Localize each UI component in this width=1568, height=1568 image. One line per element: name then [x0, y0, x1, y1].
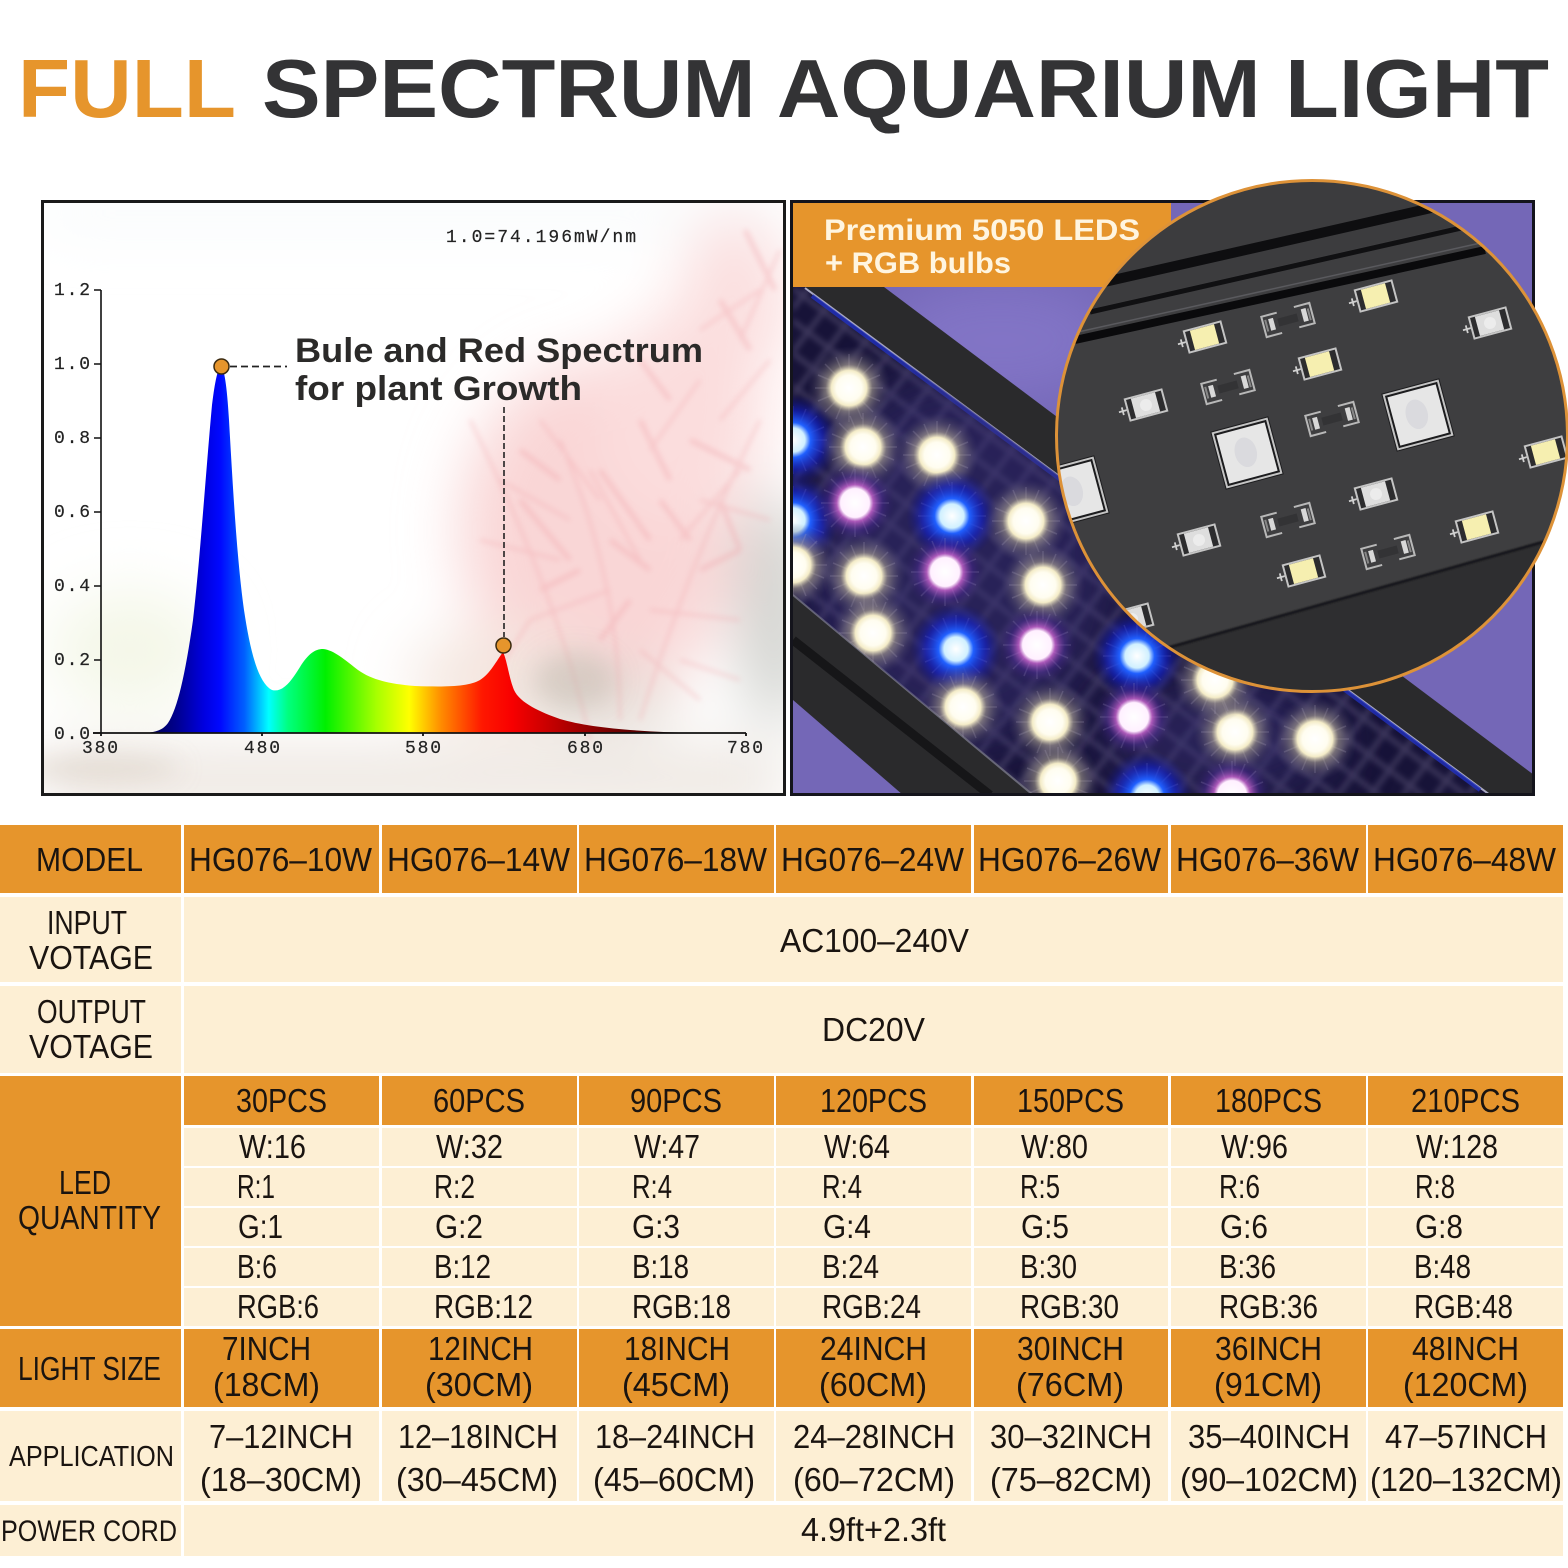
row: LED quantity: B:48 — [1414, 1248, 1471, 1285]
row: power cord: 4.9ft+2.3ft — [801, 1511, 946, 1548]
row: input voltage — [29, 904, 969, 976]
LED array — [793, 350, 1354, 793]
row: LED quantity: G:8 — [1415, 1208, 1463, 1245]
row: LED quantity: 30PCS — [236, 1082, 327, 1119]
row: LED quantity: RGB:48 — [1414, 1288, 1513, 1325]
row: light size — [18, 1330, 1528, 1403]
row: LED quantity: R:4 — [632, 1168, 672, 1205]
axis labels: 580 — [405, 739, 441, 759]
row: LED quantity: B:12 — [434, 1248, 491, 1285]
label: LED type: Premium 5050 LEDS — [824, 214, 1140, 247]
row: LED quantity: 60PCS — [433, 1082, 525, 1119]
row: light size: 48INCH — [1412, 1330, 1519, 1367]
row: application: 30–32INCH — [990, 1418, 1152, 1455]
row: LED quantity: W:16 — [239, 1128, 306, 1165]
light housing — [793, 287, 1534, 795]
row: output voltage: VOTAGE — [29, 1028, 153, 1065]
row: model: HG076–18W — [584, 841, 768, 878]
row: model: HG076–14W — [387, 841, 571, 878]
axis labels: 0.8 — [54, 429, 90, 449]
row: LED quantity: G:2 — [435, 1208, 483, 1245]
row: application: 24–28INCH — [793, 1418, 955, 1455]
title: FULL — [18, 42, 236, 135]
axis labels: 1.0=74.196mW/nm — [446, 228, 636, 248]
row: output voltage: DC20V — [822, 1011, 925, 1048]
row: input voltage: AC100–240V — [780, 922, 969, 959]
chart annotation text: for plant Growth — [295, 370, 582, 408]
row: LED quantity: W:128 — [1416, 1128, 1498, 1165]
row: application: (90–102CM) — [1180, 1461, 1358, 1498]
label: LED type — [793, 203, 1171, 287]
row: model: HG076–36W — [1176, 841, 1360, 878]
axis labels: 0.2 — [54, 651, 90, 671]
row: LED quantity: B:6 — [237, 1248, 277, 1285]
row: input voltage: INPUT — [47, 904, 127, 941]
row: LED quantity: RGB:6 — [237, 1288, 319, 1325]
label: LED type: + RGB bulbs — [825, 247, 1011, 280]
row: model: HG076–48W — [1373, 841, 1557, 878]
row: light size: 36INCH — [1215, 1330, 1322, 1367]
axis labels: 380 — [82, 739, 118, 759]
magnified LED detail circle — [1036, 180, 1568, 720]
axis labels: 0.6 — [54, 503, 90, 523]
title: SPECTRUM AQUARIUM LIGHT — [262, 42, 1549, 135]
row: application: (60–72CM) — [793, 1461, 955, 1498]
callout: blue peak marker — [214, 359, 287, 374]
row: application: 35–40INCH — [1188, 1418, 1350, 1455]
row: application: (120–132CM) — [1370, 1461, 1562, 1498]
row: LED quantity: RGB:30 — [1020, 1288, 1119, 1325]
row: LED quantity: W:80 — [1021, 1128, 1088, 1165]
row: output voltage — [29, 993, 925, 1065]
axis labels: 0.4 — [54, 577, 90, 597]
row: light size: 30INCH — [1017, 1330, 1124, 1367]
row: LED quantity: RGB:24 — [822, 1288, 921, 1325]
row: application: (45–60CM) — [593, 1461, 755, 1498]
row: LED quantity: R:6 — [1219, 1168, 1260, 1205]
row: LED quantity: W:47 — [634, 1128, 700, 1165]
row: light size: (18CM) — [213, 1366, 320, 1403]
row: LED quantity: 90PCS — [630, 1082, 722, 1119]
row: light size: 12INCH — [428, 1330, 533, 1367]
panel: spectrum chart — [20, 202, 811, 810]
row: LED quantity: G:6 — [1220, 1208, 1268, 1245]
row: LED quantity: R:8 — [1415, 1168, 1455, 1205]
spectrum curve — [146, 366, 700, 733]
row: light size: (60CM) — [819, 1366, 927, 1403]
row: model: HG076–24W — [781, 841, 965, 878]
row: LED quantity: 120PCS — [820, 1082, 927, 1119]
row: light size: (91CM) — [1214, 1366, 1322, 1403]
row: LED quantity: G:5 — [1021, 1208, 1069, 1245]
row: LED quantity: W:32 — [436, 1128, 503, 1165]
row: light size: (76CM) — [1016, 1366, 1124, 1403]
spec table — [0, 825, 1563, 1556]
axis labels: 480 — [244, 739, 280, 759]
panel: LED light photo — [747, 180, 1568, 843]
row: model: HG076–26W — [978, 841, 1162, 878]
x axis — [93, 733, 746, 736]
row: application: (30–45CM) — [396, 1461, 558, 1498]
row: model — [36, 841, 1557, 878]
row: LED quantity: R:2 — [434, 1168, 475, 1205]
chart annotation text: Bule and Red Spectrum — [295, 332, 703, 370]
row: LED quantity: QUANTITY — [18, 1199, 161, 1236]
row: LED quantity: 180PCS — [1215, 1082, 1322, 1119]
row: LED quantity: 150PCS — [1017, 1082, 1124, 1119]
row: model: HG076–10W — [189, 841, 373, 878]
row: light size: (120CM) — [1403, 1366, 1528, 1403]
row: application: (75–82CM) — [990, 1461, 1152, 1498]
row: light size: (30CM) — [425, 1366, 533, 1403]
row: LED quantity: G:4 — [823, 1208, 871, 1245]
row: LED quantity: G:3 — [632, 1208, 680, 1245]
axis labels: 1.2 — [54, 281, 90, 301]
table cell backgrounds — [0, 825, 1563, 1556]
row: LED quantity: R:5 — [1020, 1168, 1060, 1205]
row: LED quantity: B:30 — [1020, 1248, 1077, 1285]
row: application: (18–30CM) — [200, 1461, 362, 1498]
callout: red peak marker — [496, 407, 511, 653]
row: LED quantity: R:1 — [237, 1168, 275, 1205]
axis labels: 780 — [727, 739, 763, 759]
row: LED quantity — [18, 1082, 1520, 1325]
row: LED quantity: R:4 — [822, 1168, 862, 1205]
axis labels — [54, 228, 763, 759]
row: light size: (45CM) — [622, 1366, 730, 1403]
row: light size: LIGHT SIZE — [18, 1350, 161, 1387]
row: model: MODEL — [36, 841, 143, 878]
chart annotation text — [295, 332, 703, 408]
axis labels: 680 — [567, 739, 603, 759]
row: application: 12–18INCH — [398, 1418, 558, 1455]
row: power cord — [1, 1511, 946, 1548]
row: LED quantity: B:18 — [632, 1248, 689, 1285]
row: input voltage: VOTAGE — [29, 939, 153, 976]
row: application — [9, 1418, 1562, 1498]
row: power cord: POWER CORD — [1, 1515, 177, 1548]
row: LED quantity: W:64 — [824, 1128, 890, 1165]
row: LED quantity: RGB:36 — [1219, 1288, 1318, 1325]
row: application: 47–57INCH — [1385, 1418, 1547, 1455]
row: light size: 7INCH — [222, 1330, 311, 1367]
row: LED quantity: 210PCS — [1411, 1082, 1520, 1119]
row: LED quantity: G:1 — [238, 1208, 283, 1245]
row: application: APPLICATION — [9, 1441, 174, 1473]
row: LED quantity: B:24 — [822, 1248, 879, 1285]
row: application: 18–24INCH — [595, 1418, 755, 1455]
row: LED quantity: RGB:12 — [434, 1288, 533, 1325]
row: LED quantity: RGB:18 — [632, 1288, 731, 1325]
axis labels: 1.0 — [54, 355, 90, 375]
row: light size: 18INCH — [624, 1330, 730, 1367]
row: LED quantity: B:36 — [1219, 1248, 1276, 1285]
axis labels: 0.0 — [54, 725, 90, 745]
row: light size: 24INCH — [820, 1330, 927, 1367]
row: LED quantity: W:96 — [1221, 1128, 1288, 1165]
row: LED quantity: LED — [59, 1164, 111, 1201]
y axis — [93, 290, 101, 733]
row: application: 7–12INCH — [209, 1418, 353, 1455]
row: output voltage: OUTPUT — [37, 993, 146, 1030]
